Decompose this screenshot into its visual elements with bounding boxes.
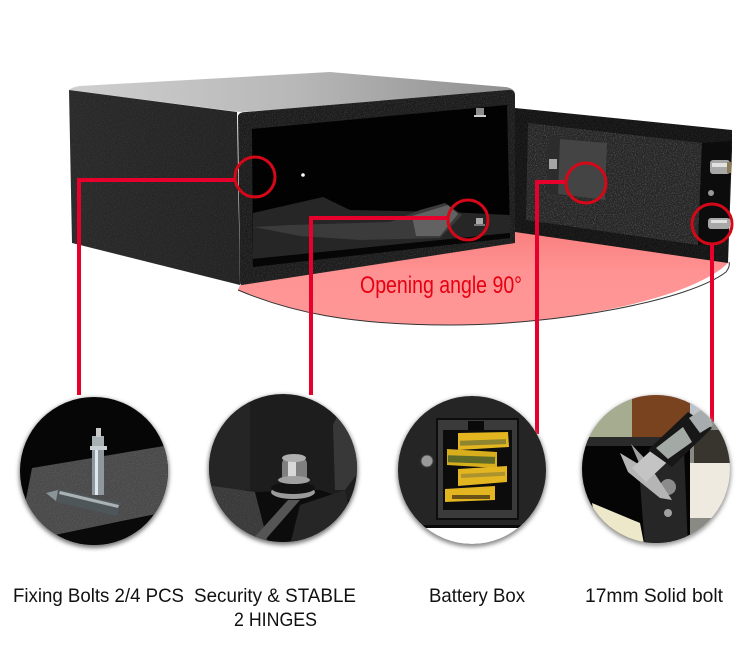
photo: fixing bolts — [15, 395, 175, 550]
upper bolt — [710, 160, 731, 174]
hinge washer — [271, 490, 315, 499]
leader: hinges — [311, 200, 488, 395]
safe door edge — [640, 455, 688, 543]
photo: battery box — [395, 395, 550, 550]
accessory bag — [254, 203, 462, 240]
top face — [69, 72, 515, 112]
batteries — [445, 432, 509, 502]
safe body — [69, 72, 515, 285]
battery screw — [549, 159, 557, 169]
upper hinge — [474, 108, 486, 117]
caption: hinges: 2 HINGES — [234, 609, 317, 631]
photo: caliper on bolt — [580, 394, 735, 549]
leader: fixing bolts — [79, 157, 275, 395]
safe door — [515, 108, 732, 263]
door bolt — [660, 479, 676, 495]
angle label: Opening angle 90° — [360, 272, 522, 299]
caption: hinges — [194, 585, 356, 631]
lying bolt — [46, 489, 120, 516]
hinge pin — [278, 454, 310, 484]
door screw — [421, 455, 433, 467]
caption: solid bolt: 17mm Solid bolt — [585, 585, 724, 607]
front frame — [238, 90, 515, 285]
photo: hinge — [205, 390, 365, 550]
battery box — [547, 136, 607, 200]
floor carpet — [253, 197, 510, 259]
lower bolt — [708, 218, 730, 229]
bolt channel — [698, 141, 731, 245]
lower hinge — [474, 218, 485, 226]
caption: fixing bolts: Fixing Bolts 2/4 PCS — [13, 585, 184, 607]
floor lip — [253, 233, 510, 267]
leader: solid bolt — [692, 204, 732, 422]
upright bolt — [90, 428, 107, 495]
bolt channel screw — [708, 190, 714, 196]
wall hole — [301, 173, 305, 177]
caliper — [620, 405, 713, 500]
leader: battery box — [537, 163, 606, 434]
door inner plate — [526, 123, 702, 245]
opening angle floor sector — [238, 232, 729, 325]
caption: battery box: Battery Box — [429, 585, 525, 607]
interior — [252, 105, 510, 267]
caption: hinges: Security & STABLE — [194, 585, 356, 607]
left side face — [69, 90, 240, 285]
